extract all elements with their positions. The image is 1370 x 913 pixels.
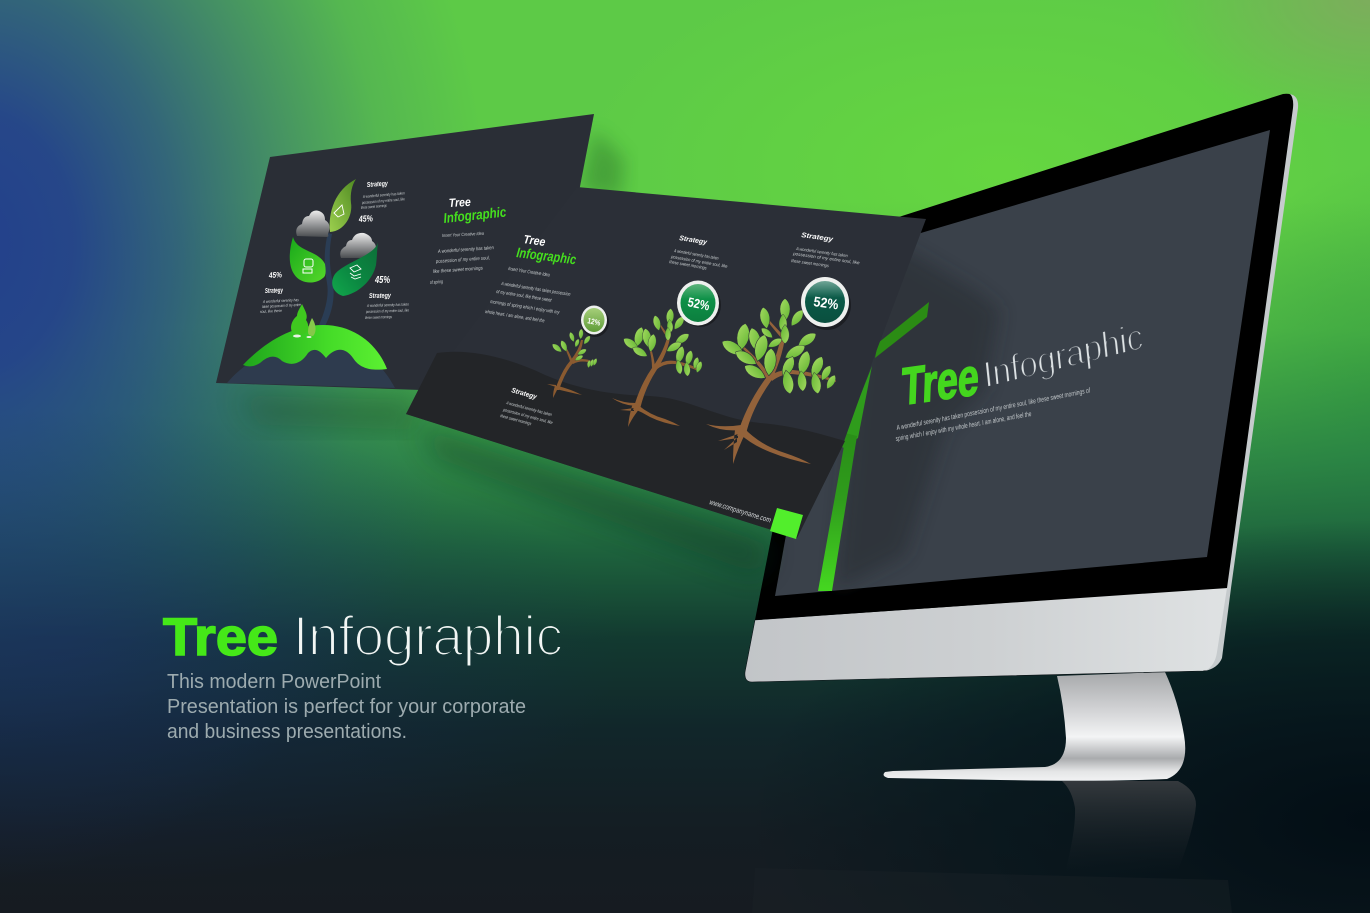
strategy text right: these sweet mornings <box>791 258 830 268</box>
description paragraph: This modern PowerPoint <box>167 671 381 693</box>
screen description: spring which I enjoy with my whole heart. I am alone, and feel the <box>895 411 1032 443</box>
website url: www.companyname.com <box>708 497 772 525</box>
plant stem <box>319 233 334 326</box>
leaf right with icon <box>332 242 378 296</box>
left slide heading: A wonderful serenity has taken <box>437 245 494 255</box>
slide heading: mornings of spring which I enjoy with my <box>490 299 560 316</box>
callout top right <box>358 180 406 224</box>
slide heading: of my entire soul, like these sweet <box>496 289 552 304</box>
monitor chin <box>745 587 1228 682</box>
screen title: Infographic: Infographic <box>981 314 1145 396</box>
callout top right: 45% <box>358 213 373 224</box>
slide heading <box>485 232 577 324</box>
badge 12%: 12% <box>587 316 601 328</box>
screen green accent <box>818 302 929 591</box>
shadows under floating slides <box>235 130 770 575</box>
tree large <box>706 299 838 464</box>
strategy text right: Strategy <box>801 232 835 244</box>
left slide heading: Insert Your Creative Idea <box>442 231 484 238</box>
left slide heading: possession of my entire soul, <box>435 255 490 265</box>
monitor <box>745 94 1298 781</box>
monitor screen <box>775 130 1270 596</box>
strategy text middle: Strategy <box>679 235 709 247</box>
shadow cast on screen <box>835 240 1000 590</box>
callout left <box>260 270 302 314</box>
strategy text middle <box>669 235 728 271</box>
left slide heading: of spring <box>430 279 443 286</box>
slide heading: A wonderful serenity has taken possession <box>500 281 571 298</box>
strategy text right: possession of my entire soul, like <box>792 251 860 265</box>
badge 52% large: 52% <box>813 293 840 313</box>
callout right: A wonderful serenity has taken <box>366 302 410 308</box>
callout top right: Strategy <box>367 180 389 189</box>
leaf top with icon <box>330 179 356 232</box>
strategy text bottom: these sweet mornings <box>500 413 532 426</box>
title: Infographic: Infographic <box>293 604 563 667</box>
screen title: Tree: Tree <box>901 348 980 417</box>
small bushes <box>291 304 316 338</box>
left slide heading: like these sweet mornings <box>433 265 483 275</box>
panel: left slide <box>216 114 594 390</box>
slide heading: Insert Your Creative Idea <box>508 266 550 279</box>
tree small <box>547 329 598 398</box>
badge 52% large <box>801 277 851 330</box>
strategy text bottom: A wonderful serenity has taken <box>505 400 553 417</box>
badge 52% medium <box>677 280 721 327</box>
description paragraph: and business presentations. <box>167 721 407 743</box>
reflection of monitor <box>752 781 1232 913</box>
callout left: soul, like these <box>260 308 283 314</box>
monitor stand <box>884 672 1185 781</box>
green hill <box>243 325 387 370</box>
title block <box>163 604 563 743</box>
callout right <box>365 275 410 320</box>
green square <box>770 508 803 539</box>
description paragraph <box>167 671 526 743</box>
callout left: Strategy <box>265 287 284 295</box>
left slide heading: Tree <box>448 195 471 210</box>
callout top right: these sweet mornings <box>361 203 387 210</box>
dark ground <box>406 352 845 538</box>
description paragraph: Presentation is perfect for your corporate <box>167 696 526 718</box>
screen title <box>901 314 1145 417</box>
callout top right: A wonderful serenity has taken <box>362 190 406 199</box>
callout top right: possession of my entire soul, like <box>361 196 405 205</box>
left slide background <box>216 114 594 390</box>
left slide heading <box>430 195 507 286</box>
slide heading: Infographic <box>516 244 577 267</box>
callout left: 45% <box>268 270 282 280</box>
cloud right <box>340 233 376 258</box>
strategy text bottom: Strategy <box>510 387 538 401</box>
right slide background <box>406 187 926 538</box>
leaf left with icon <box>290 237 326 283</box>
strategy text right: A wonderful serenity has taken <box>795 246 848 258</box>
strategy text middle: A wonderful serenity has taken <box>673 248 719 261</box>
tree medium <box>612 308 704 427</box>
monitor bezel <box>755 94 1296 620</box>
callouts <box>260 180 410 320</box>
strategy text middle: possession of my entire soul, like <box>670 254 728 269</box>
callout left: A wonderful serenity has <box>262 297 299 304</box>
strategy text bottom: possession of my entire soul, like <box>502 407 554 425</box>
callout right: Strategy <box>369 293 392 300</box>
cloud left <box>296 211 329 237</box>
callout right: these sweet mornings <box>365 314 392 320</box>
slide heading: Tree <box>523 232 547 249</box>
badge 52% medium: 52% <box>686 294 711 314</box>
callout right: possession of my entire soul, like <box>365 307 410 314</box>
callout right: 45% <box>374 275 390 286</box>
strategy text bottom <box>500 387 554 426</box>
strategy text right <box>791 232 860 268</box>
dark hill <box>227 340 395 388</box>
left slide heading: Infographic <box>443 203 507 226</box>
slide heading: whole heart. I am alone, and feel the <box>485 309 545 324</box>
monitor silver rim <box>1205 94 1298 671</box>
badge 12% <box>581 306 609 337</box>
strategy text middle: these sweet mornings <box>669 259 708 271</box>
panel: right slide <box>406 187 926 539</box>
callout left: taken possession of my entire <box>262 302 302 309</box>
title: Tree: Tree <box>163 608 278 667</box>
screen description: A wonderful serenity has taken possession of my entire soul, like these sweet mornings of <box>895 387 1091 432</box>
